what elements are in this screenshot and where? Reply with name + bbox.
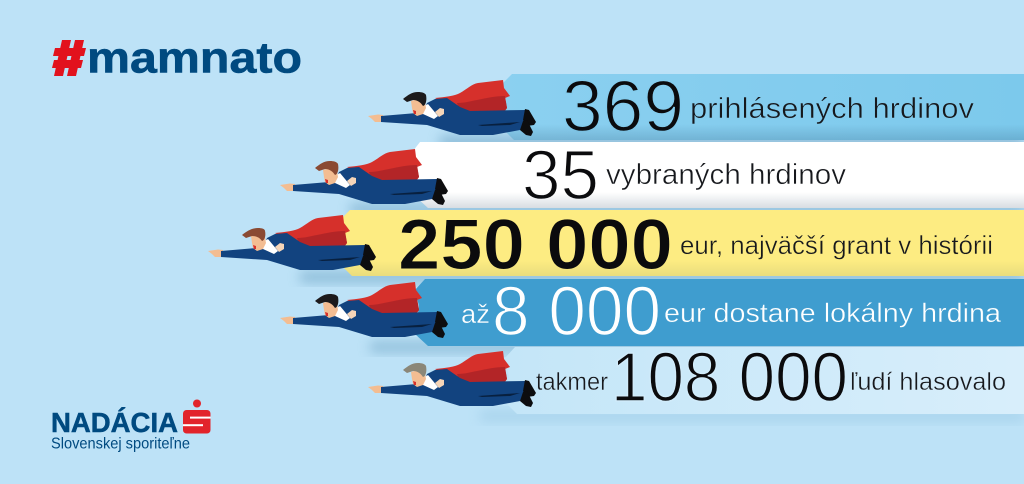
icon: flying hero 4 — [280, 282, 448, 338]
icon: red S symbol — [183, 400, 210, 434]
panel: 369 prihlásených hrdinov — [440, 67, 1024, 148]
panel: 250 000 eur, najväčší grant v histórii — [300, 206, 1024, 285]
icon: flying hero 3 — [208, 215, 376, 271]
panel: takmer 108 000 ľudí hlasovalo: ľudí hlasovalo — [850, 368, 1006, 396]
panel: takmer 108 000 ľudí hlasovalo: takmer — [536, 368, 608, 396]
panel: až 8 000 eur dostane lokálny hrdina: eur dostane lokálny hrdina — [664, 298, 1002, 328]
panel: takmer 108 000 ľudí hlasovalo — [480, 338, 1024, 421]
panel: takmer 108 000 ľudí hlasovalo: 108 000 — [611, 338, 848, 416]
panel: až 8 000 eur dostane lokálny hrdina — [370, 272, 1024, 352]
panel: 35 vybraných hrdinov: vybraných hrdinov — [606, 159, 847, 191]
icon: flying hero 1 — [368, 80, 536, 136]
panel: 35 vybraných hrdinov: 35 — [522, 136, 599, 214]
panel: 35 vybraných hrdinov — [350, 136, 1024, 214]
panel: až 8 000 eur dostane lokálny hrdina: 8 000 — [492, 272, 661, 350]
logo: Nadácia Slovenskej sporiteľne — [51, 400, 210, 452]
panel: 369 prihlásených hrdinov: prihlásených hrdinov — [690, 93, 975, 125]
icon: flying hero 2 — [280, 149, 448, 205]
icon: red hash — [52, 40, 86, 76]
panel: 369 prihlásených hrdinov: 369 — [562, 67, 684, 147]
logo: Nadácia Slovenskej sporiteľne: NADÁCIA — [51, 407, 178, 438]
icon: flying hero 5 — [368, 351, 536, 407]
panel: 250 000 eur, najväčší grant v histórii: eur, najväčší grant v histórii — [680, 230, 993, 260]
panel: až 8 000 eur dostane lokálny hrdina: až — [461, 299, 490, 329]
logo: Nadácia Slovenskej sporiteľne: Slovenskej sporiteľne — [51, 436, 190, 452]
title: #mamnato: mamnato — [87, 34, 302, 82]
panel: 250 000 eur, najväčší grant v histórii: 250 000 — [398, 206, 673, 285]
